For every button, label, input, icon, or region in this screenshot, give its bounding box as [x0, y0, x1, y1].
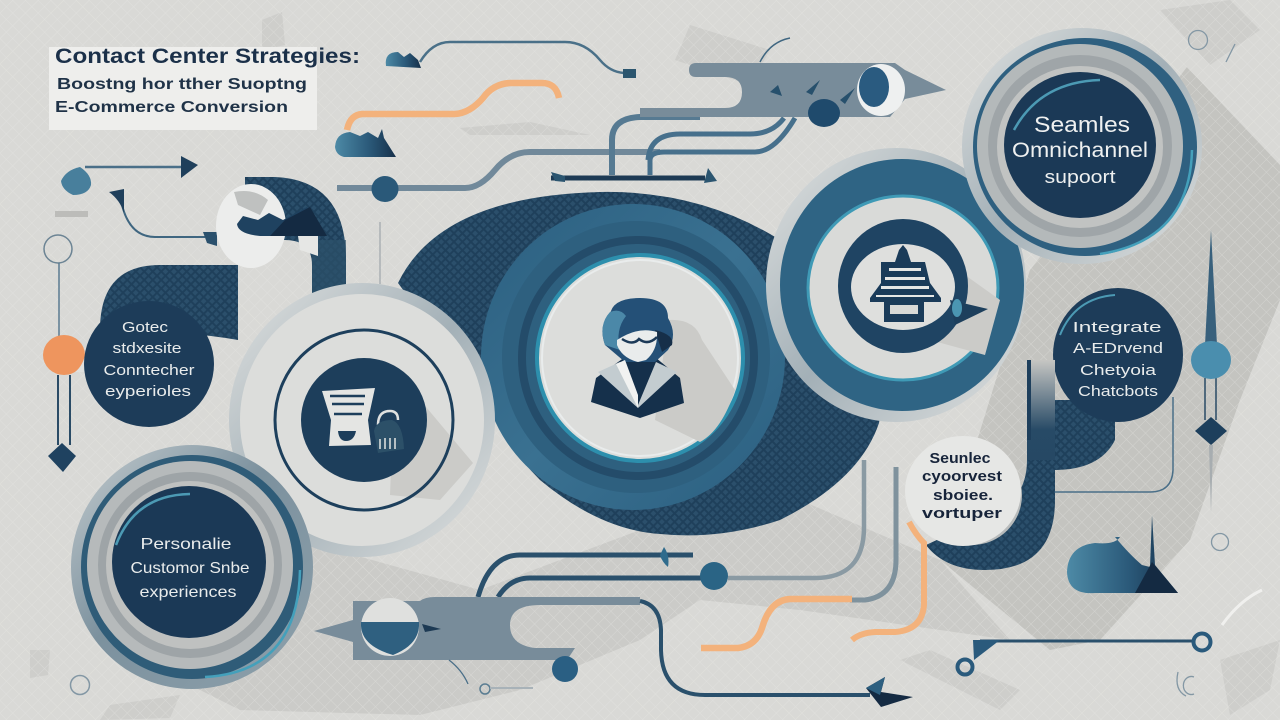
subtitle [55, 76, 307, 116]
textured arch [100, 177, 346, 340]
panel: seamless omnichannel circle [962, 28, 1202, 264]
text: right disc: Chetyoia [1080, 362, 1157, 379]
dot on connector [372, 176, 398, 202]
textured band beside button [926, 360, 1055, 570]
text: personalise: experiences [140, 584, 236, 601]
subtitle: E-Commerce Conversion [55, 99, 288, 116]
gray connector group [337, 117, 795, 188]
text: callout [922, 451, 1002, 522]
connector: bottom-right rings [958, 634, 1210, 674]
panel: top-right icon circle [766, 148, 1026, 422]
textured circle behind centre [398, 192, 900, 535]
icon: document [322, 388, 375, 446]
panel: bottom-left circle [71, 445, 313, 689]
gray tag [55, 211, 88, 217]
subtitle: Boostng hor tther Suoptng [57, 76, 307, 93]
text: seamless omnichannel [1012, 112, 1148, 187]
text: personalise: Personalie [140, 536, 232, 553]
fish tail marker [660, 547, 668, 567]
thin vertical line [379, 222, 381, 284]
text: seamless omnichannel: Omnichannel [1012, 139, 1148, 162]
text: right disc: A-EDrvend [1073, 340, 1163, 357]
connector: orange line with blob [335, 83, 559, 157]
connector: curved arrow [109, 189, 217, 246]
connector: right thin L line [1055, 397, 1173, 492]
connector: gray bottom lines [478, 460, 896, 600]
pin: right spike and ball [1191, 230, 1231, 550]
text: personalise: Customor Snbe [130, 560, 250, 577]
text: personalise [130, 536, 250, 601]
text: callout: cyoorvest [922, 469, 1002, 485]
text: seamless omnichannel: Seamles [1034, 112, 1130, 137]
text: callout: vortuper [922, 506, 1002, 522]
icon: white head with dark hat [216, 184, 327, 268]
text: left disc [104, 319, 194, 400]
connector: top line with blob [386, 42, 636, 78]
arrow: bottom dark line [640, 601, 913, 707]
button: white callout [905, 436, 1022, 546]
text: right disc: Chatcbots [1078, 383, 1158, 400]
panel: left dark disc [84, 301, 214, 427]
arrow banner bottom [314, 597, 640, 660]
panel: right dark disc [1053, 288, 1183, 470]
blob: bottom right [1067, 515, 1178, 593]
arrow banner top [640, 38, 946, 127]
connector: orange lines [701, 522, 924, 648]
title: Contact Center Strategies: [55, 44, 360, 68]
text: right disc [1072, 319, 1163, 400]
icon: person [591, 298, 684, 418]
pin: left orange [43, 235, 86, 472]
icon: dark ring [838, 219, 968, 353]
connector: left arrow [61, 156, 198, 195]
text: callout: sboiee. [933, 488, 993, 504]
text: left disc: stdxesite [112, 340, 182, 357]
text: left disc: Gotec [122, 319, 169, 336]
icon: pagoda [870, 245, 941, 322]
text: callout: Seunlec [930, 451, 990, 467]
panel: left document circle [229, 283, 495, 557]
text: seamless omnichannel: supoort [1044, 167, 1116, 187]
icon: lock [374, 411, 404, 453]
text: left disc: Conntecher [104, 362, 194, 379]
text: right disc: Integrate [1072, 319, 1162, 336]
panel: centre circle [481, 204, 785, 510]
title box [49, 44, 360, 130]
text: left disc: eyperioles [105, 383, 191, 400]
small ball and thin curve [449, 656, 578, 694]
dot on bottom connector [700, 562, 728, 590]
